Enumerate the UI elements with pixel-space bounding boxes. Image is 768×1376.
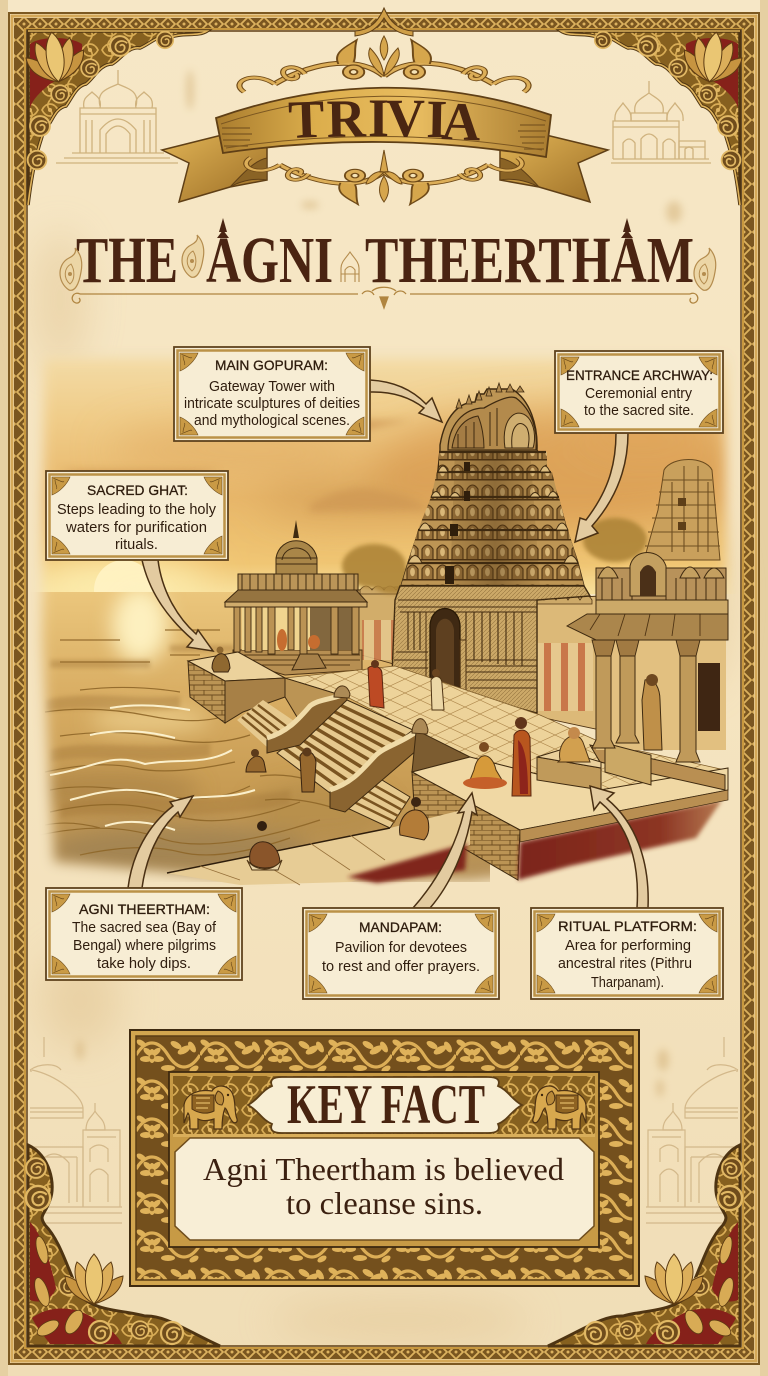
title word trivia: TRIVIA [287,88,482,152]
arrow: ritual platform [590,786,648,908]
elephant left [184,1086,237,1129]
callout: main gopuram: Gateway Tower with [209,379,335,395]
callout: ritual platform: RITUAL PLATFORM: [558,918,697,934]
callout: entrance archway: Ceremonial entry [585,386,693,402]
main title: the agni theertham: THE [76,224,178,297]
temple sketch bottom left [30,1037,122,1223]
key fact statement: Agni Theertham is believed [203,1151,564,1187]
bottom-left corner spandrel [26,1145,220,1346]
callout: main gopuram: and mythological scenes. [194,413,350,429]
lower walkway [167,808,470,885]
right mandapa [537,552,728,790]
panel: key fact [130,1030,639,1286]
elephant right [533,1086,586,1129]
callout: sacred ghat: waters for purification [65,520,207,536]
callout: agni theertham: The sacred sea (Bay of [72,920,217,936]
arrow: main gopuram [370,380,442,422]
main gopuram base and doorway [392,586,590,713]
arrow: sacred ghat [142,560,213,651]
callout: ritual platform: Area for performing [565,938,691,954]
back wall of complex [358,586,408,668]
lotus bottom right [645,1254,703,1304]
lotus bottom left [65,1254,123,1304]
title divider flourish [72,287,698,308]
main title: the agni theertham [60,218,716,297]
callout: main gopuram [174,347,370,441]
arrow: agni theertham [128,796,193,888]
callout: sacred ghat: Steps leading to the holy [57,502,217,518]
pilgrims [212,646,590,870]
plaza paving [285,666,725,790]
temple sketch top right [611,81,711,163]
callout: ritual platform [531,908,723,999]
callout: ritual platform: ancestral rites (Pithru [558,956,692,972]
callout: mandapam: MANDAPAM: [359,919,442,935]
arrow: mandapam [413,793,477,908]
callout: agni theertham: take holy dips. [97,956,191,972]
callout: main gopuram: MAIN GOPURAM: [215,357,328,373]
main title: the agni theertham: AGNI [206,224,333,297]
key fact statement [175,1138,594,1240]
top-left corner spandrel with lotus [23,28,207,205]
callout: sacred ghat: SACRED GHAT: [87,482,188,498]
callout: mandapam: to rest and offer prayers. [322,959,480,975]
callout: main gopuram: intricate sculptures of deities [184,396,360,412]
callout: entrance archway [555,351,723,433]
temple sketch top left [56,70,178,163]
main gopuram tower [401,383,584,586]
ornament below banner [246,150,522,204]
sacred ghat platform [188,652,347,747]
callout: entrance archway: to the sacred site. [584,403,694,419]
trivia ribbon banner [162,88,608,202]
left pavilion [225,520,367,675]
illustration: temple by the sea at sunset [20,340,750,885]
callout: agni theertham: AGNI THEERTHAM: [79,901,210,917]
callout: agni theertham: Bengal) where pilgrims [73,938,216,954]
callout: agni theertham [46,888,242,980]
callout: entrance archway: ENTRANCE ARCHWAY: [566,367,713,383]
temple sketch bottom right [646,1037,738,1223]
callout: sacred ghat [46,471,228,560]
bottom-right corner spandrel [548,1145,742,1346]
main ghat stairs [267,692,417,828]
key fact statement: to cleanse sins. [286,1185,483,1221]
second distant gopuram [644,460,720,560]
callout: ritual platform: Tharpanam). [591,975,664,991]
ornament above banner [239,36,529,92]
border top peak ornament [355,8,413,36]
callout: mandapam [303,908,499,999]
background trees [342,518,647,594]
top-right corner spandrel with lotus [561,28,745,205]
callout: mandapam: Pavilion for devotees [335,940,467,956]
key fact heading plaque: KEY FACT [287,1074,485,1136]
ritual platform structure [412,732,728,880]
arrow: entrance archway [575,433,628,542]
callout: sacred ghat: rituals. [115,537,158,553]
sky and sea wash [20,340,750,882]
